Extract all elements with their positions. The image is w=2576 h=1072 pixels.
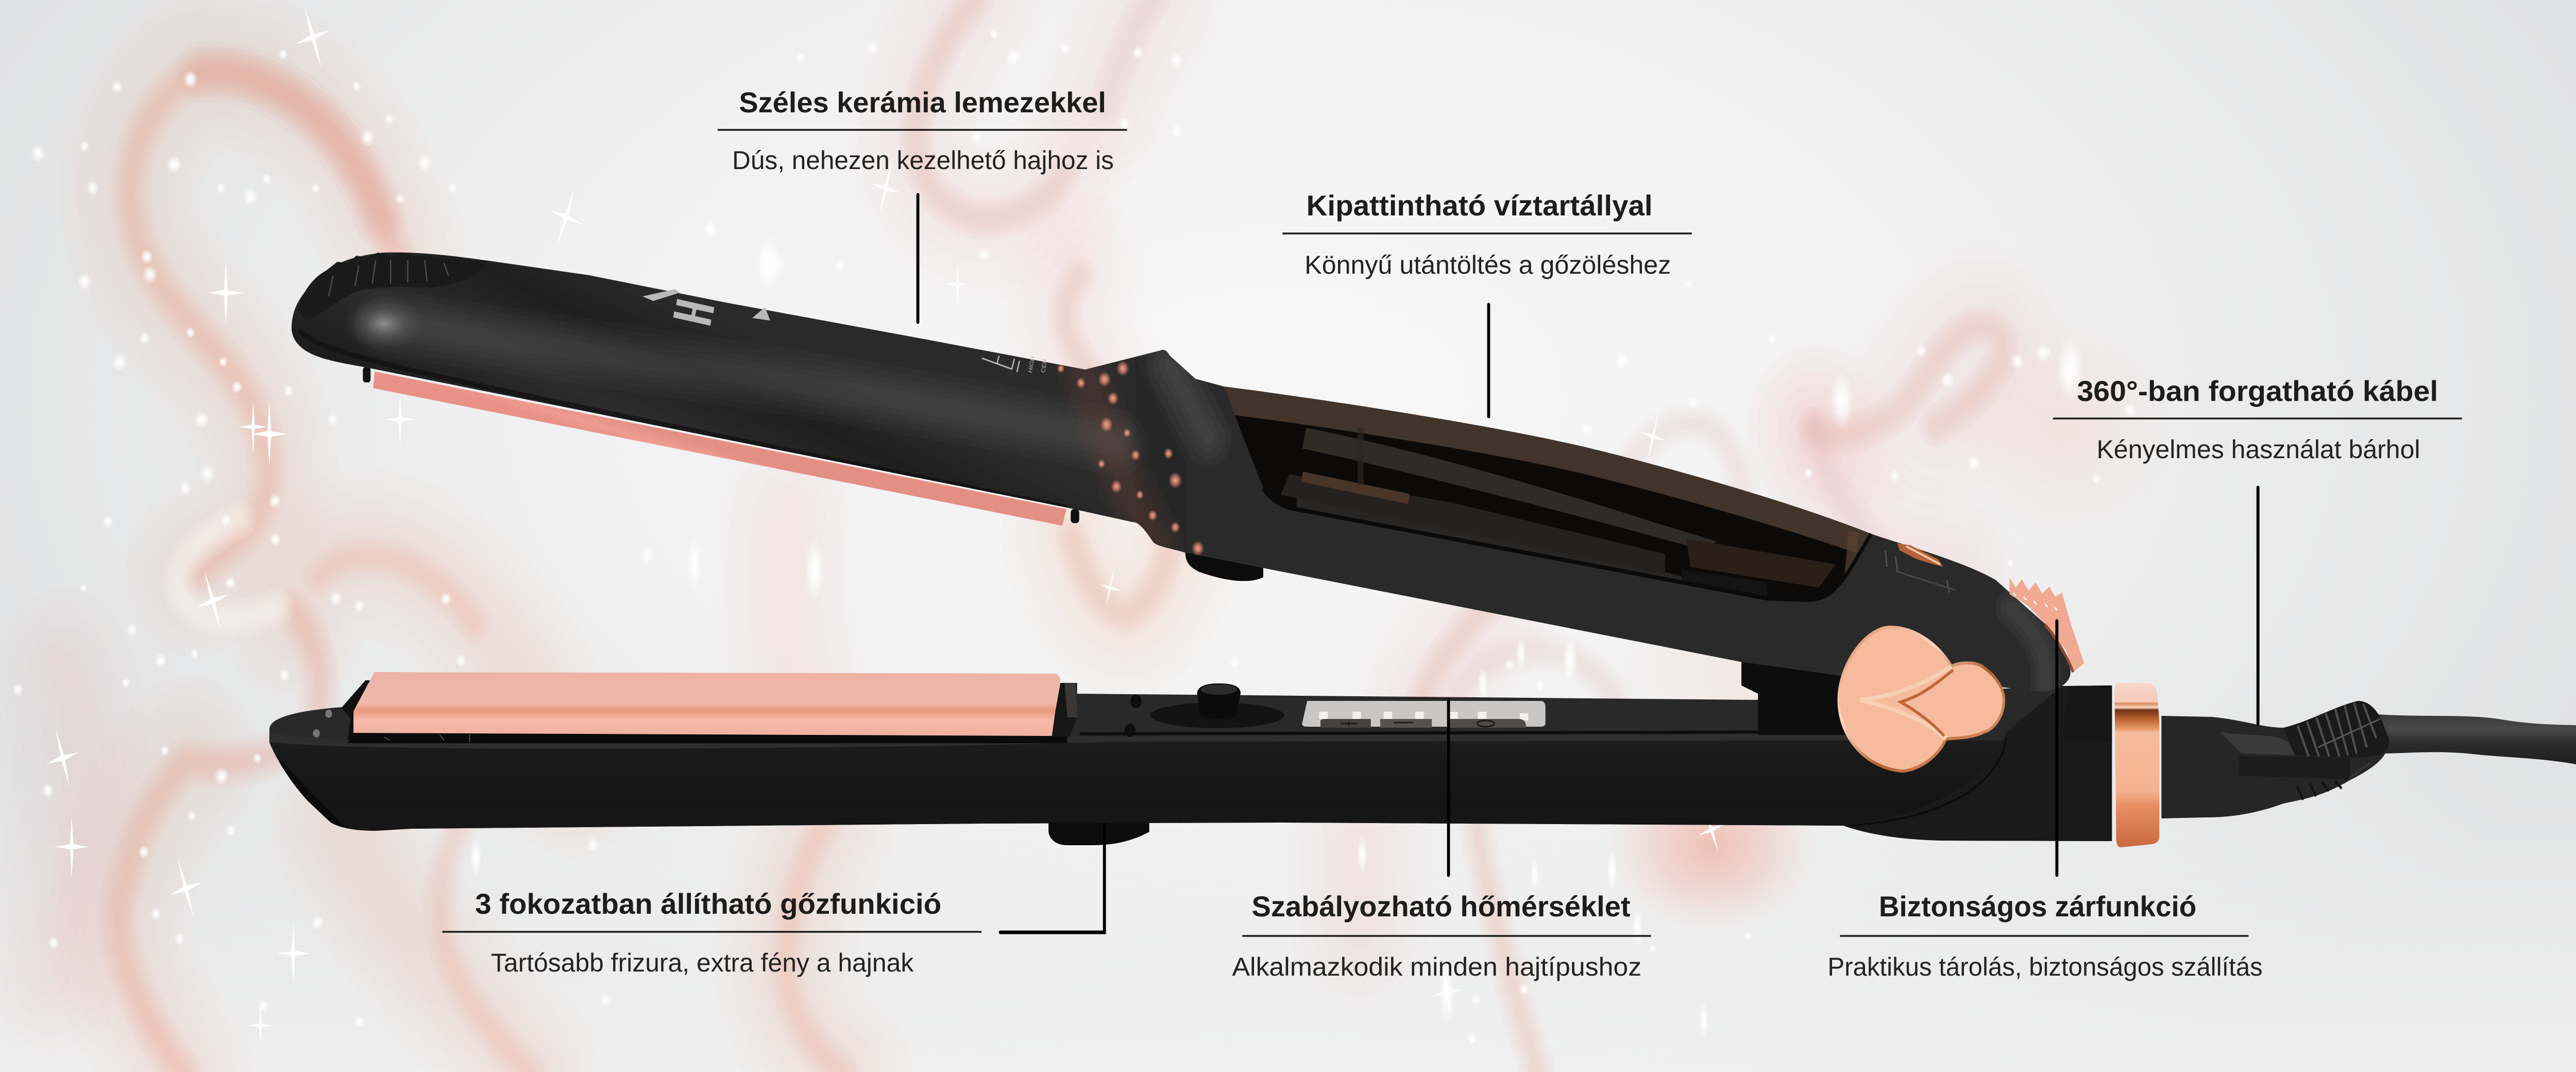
description: Alkalmazkodik minden hajtípushoz [1232, 952, 1641, 981]
cable connector with ribs [2161, 701, 2389, 818]
upper ceramic plate [373, 372, 1066, 526]
rose gold hinge medallion [1839, 627, 2004, 771]
leader line [1487, 305, 1490, 416]
arm foot [1185, 550, 1263, 581]
leader line [916, 195, 920, 322]
arm body [292, 253, 2071, 692]
description: Tartósabb frizura, extra fény a hajnak [491, 948, 914, 977]
heading: Szabályozható hőmérséklet [1252, 890, 1631, 923]
sparkle dots [12, 28, 2137, 1045]
heading: Biztonságos zárfunkció [1879, 890, 2196, 923]
hair straightener product [265, 253, 2576, 847]
power cable [2378, 714, 2576, 764]
callout: safety lock [1827, 621, 2263, 981]
steam knob underside foot [1048, 823, 1149, 845]
callout: adjustable steam [442, 825, 1105, 977]
lighter rim [279, 743, 1002, 749]
ceramic badge [982, 356, 1048, 374]
soft rose blobs [1605, 314, 2173, 933]
callout: wide ceramic plates [718, 86, 1127, 322]
rose gold ring [2114, 683, 2159, 847]
copper mode button [1885, 543, 1955, 593]
transparent water tank [1221, 387, 1878, 600]
whitish swirl [179, 520, 278, 619]
temperature control panel [1302, 701, 1546, 728]
front face [265, 740, 2112, 845]
pale rose glow swirls [51, 0, 2002, 979]
ceramic badge: CER [1040, 358, 1048, 374]
right hinge shell [1900, 685, 2112, 841]
strong rose swirl strokes [119, 72, 395, 1072]
sparkle stars [39, 0, 1732, 1047]
elbow leader line [1000, 825, 1105, 932]
leader line [2256, 488, 2260, 724]
hinge block [1741, 658, 1849, 735]
callout: 360 degree rotating cable [2053, 375, 2462, 724]
heading: Kipattintható víztartállyal [1307, 189, 1653, 222]
plate end pins [363, 367, 370, 382]
heading: 3 fokozatban állítható gőzfunkició [475, 887, 941, 920]
description: Kényelmes használat bárhol [2096, 434, 2420, 464]
description: Praktikus tárolás, biztonságos szállítás [1827, 952, 2263, 981]
description: Könnyű utántöltés a gőzöléshez [1304, 250, 1671, 279]
faint rose swirl strokes [1106, 0, 1874, 696]
callout: flip-open water tank [1282, 189, 1692, 416]
ceramic badge: HIGH [1027, 356, 1036, 374]
arm shading [1161, 349, 2071, 689]
rose gold lock slider [2009, 578, 2084, 672]
leader line [1447, 700, 1450, 875]
description: Dús, nehezen kezelhető hajhoz is [732, 145, 1114, 175]
lower body [265, 685, 2112, 845]
groove [1080, 732, 1844, 734]
upper arm [292, 253, 2100, 701]
medium rose swirl strokes [318, 0, 2002, 1072]
steam slider and deck [1125, 683, 1284, 737]
strongest swirl arc at the upper left [200, 72, 380, 216]
brand logo mark [642, 289, 770, 323]
heading: 360°-ban forgatható kábel [2077, 375, 2438, 407]
wide rose glow swirls [119, 72, 1170, 1072]
callout: adjustable temperature [1232, 700, 1651, 981]
lower ceramic plate [313, 672, 1077, 743]
heading: Széles kerámia lemezekkel [739, 86, 1106, 119]
ribbed tip grip [298, 253, 489, 319]
sparkles on the arm neck [1057, 361, 1205, 556]
leader line [2055, 621, 2059, 875]
